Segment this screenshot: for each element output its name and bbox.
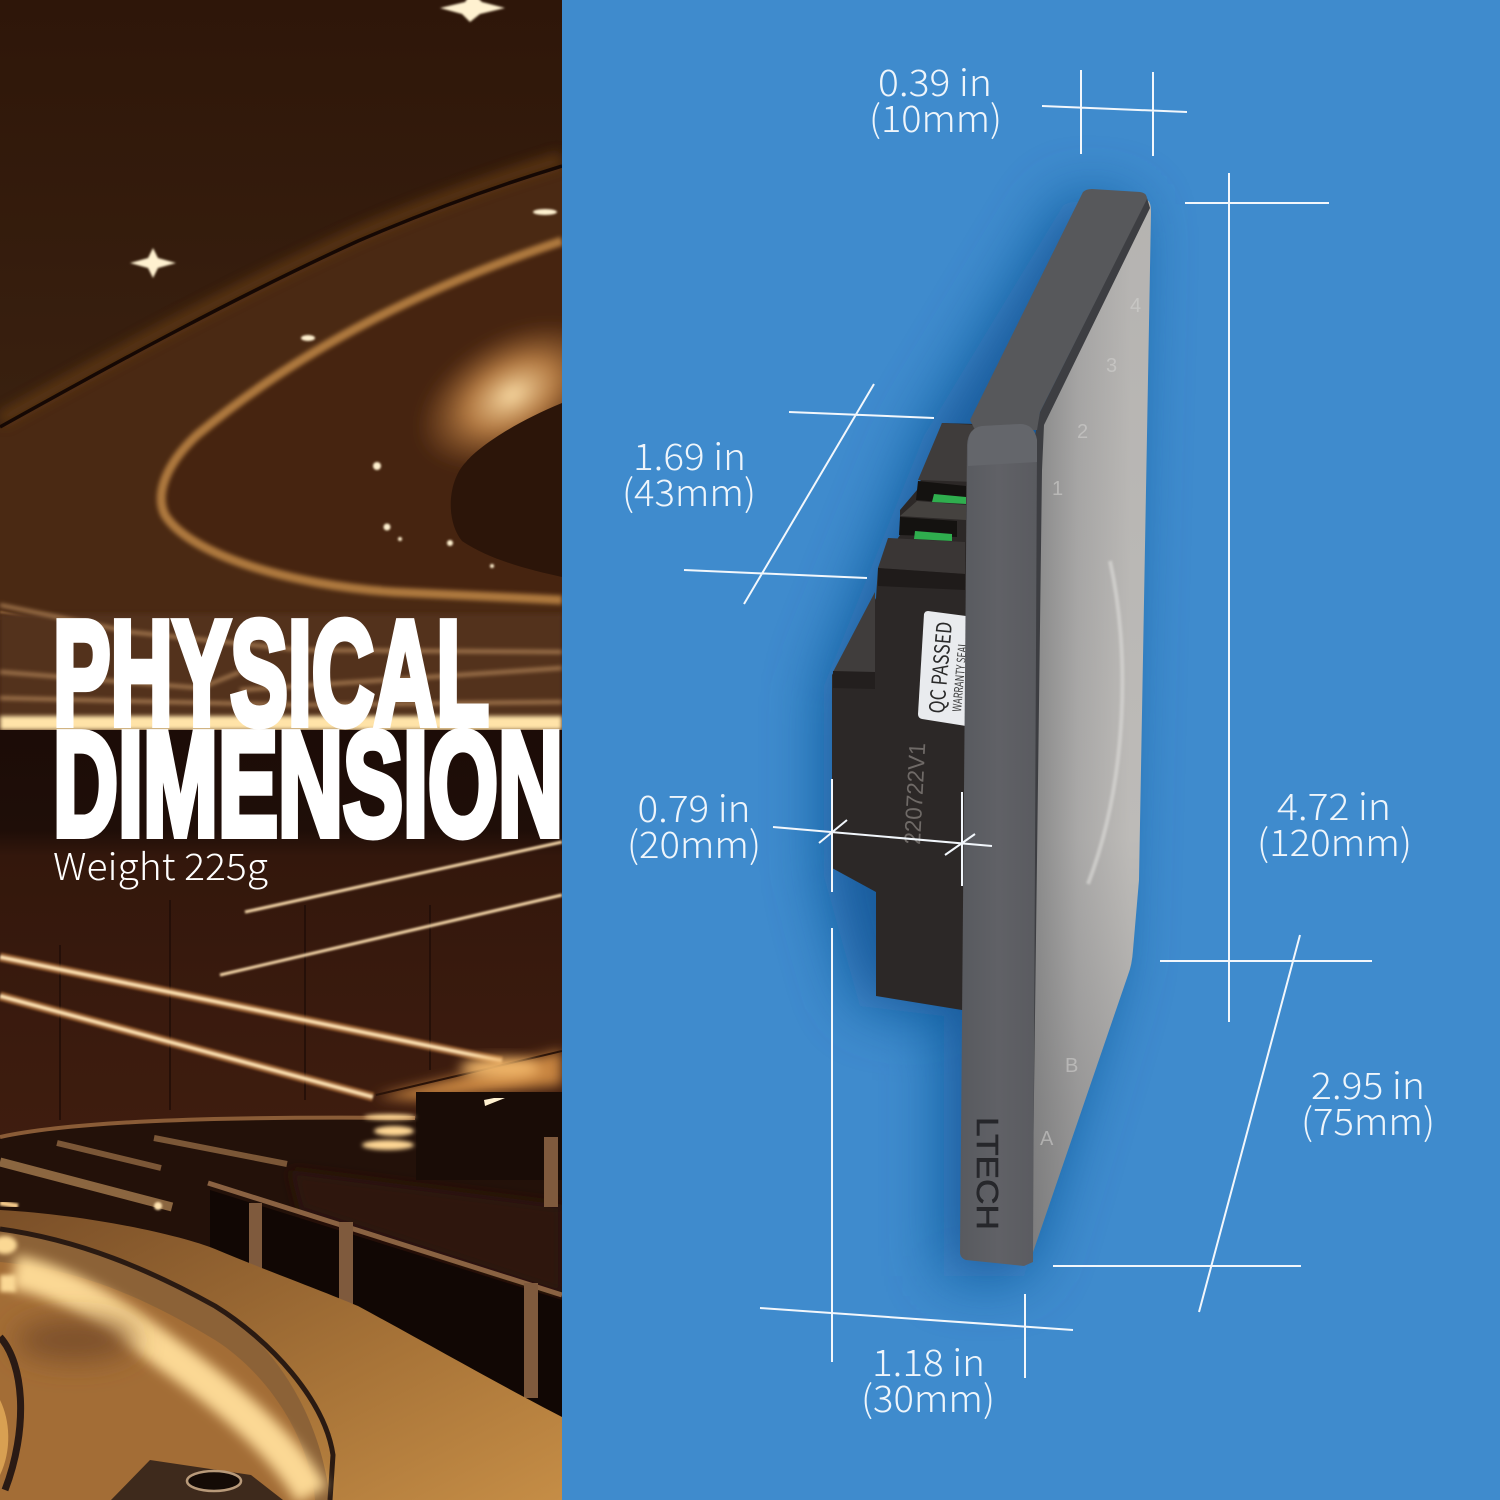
side edge xyxy=(960,424,1037,1266)
dimension: 0.79 in: 0.79 in xyxy=(638,779,750,833)
green terminals xyxy=(899,481,966,541)
touch key glyphs xyxy=(1040,295,1141,1150)
back housing xyxy=(832,423,975,1012)
ring indicator xyxy=(1088,561,1122,884)
subtitle: weight: Weight 225g xyxy=(53,837,268,891)
front face xyxy=(1025,200,1151,1262)
LTECH logo: LTECH xyxy=(970,1117,1005,1230)
touch key glyphs: 3 xyxy=(1106,355,1117,377)
dimension: 2.95 in xyxy=(1053,935,1435,1312)
foreground floor xyxy=(0,1210,562,1500)
dimension: 4.72 in xyxy=(1160,173,1412,1022)
dimension: 2.95 in: (75mm) xyxy=(1301,1092,1435,1146)
dimension: 2.95 in: 2.95 in xyxy=(1311,1056,1425,1110)
dimension: 0.79 in xyxy=(627,779,992,892)
serial number: 220722V1 xyxy=(899,742,930,845)
QC sticker: WARRANTY SEAL xyxy=(948,641,971,712)
light strips xyxy=(0,842,562,1097)
dimension: 0.39 in: (10mm) xyxy=(869,89,1002,143)
touch key glyphs: B xyxy=(1065,1055,1078,1077)
dimension: 1.69 in xyxy=(622,384,934,604)
lower seating tiers xyxy=(0,1118,562,1300)
title xyxy=(53,591,563,867)
dimension: 0.39 in xyxy=(869,53,1187,156)
dimension: 4.72 in: 4.72 in xyxy=(1277,777,1391,831)
dimension: 4.72 in: (120mm) xyxy=(1257,813,1412,867)
device: wall touch panel side view xyxy=(832,189,1151,1266)
panel: architectural lighting photo xyxy=(0,0,562,1500)
dimension: 1.69 in: 1.69 in xyxy=(633,427,746,481)
dimension: 1.18 in: (30mm) xyxy=(861,1369,995,1423)
light spots xyxy=(130,0,557,568)
QC sticker: QC PASSED xyxy=(921,620,959,715)
touch key glyphs: A xyxy=(1040,1128,1054,1150)
face lower shading xyxy=(1025,200,1151,1262)
panel: blue background xyxy=(562,0,1500,1500)
dimension: 0.79 in: (20mm) xyxy=(627,815,761,869)
QC sticker xyxy=(918,611,971,726)
top edge xyxy=(970,189,1147,430)
title: PHYSICAL xyxy=(53,591,489,756)
device shadow xyxy=(824,196,1134,1276)
dimension: 0.39 in: 0.39 in xyxy=(878,53,992,107)
dimension: 1.69 in: (43mm) xyxy=(622,463,756,517)
touch key glyphs: 1 xyxy=(1052,478,1063,500)
shadow strip xyxy=(1026,198,1150,1262)
dimension: 1.18 in: 1.18 in xyxy=(872,1333,985,1387)
touch key glyphs: 4 xyxy=(1130,295,1141,317)
dimension: 1.18 in xyxy=(760,928,1073,1423)
touch key glyphs: 2 xyxy=(1077,421,1088,443)
wall panel seams xyxy=(60,900,430,1120)
title: DIMENSION xyxy=(53,702,563,867)
